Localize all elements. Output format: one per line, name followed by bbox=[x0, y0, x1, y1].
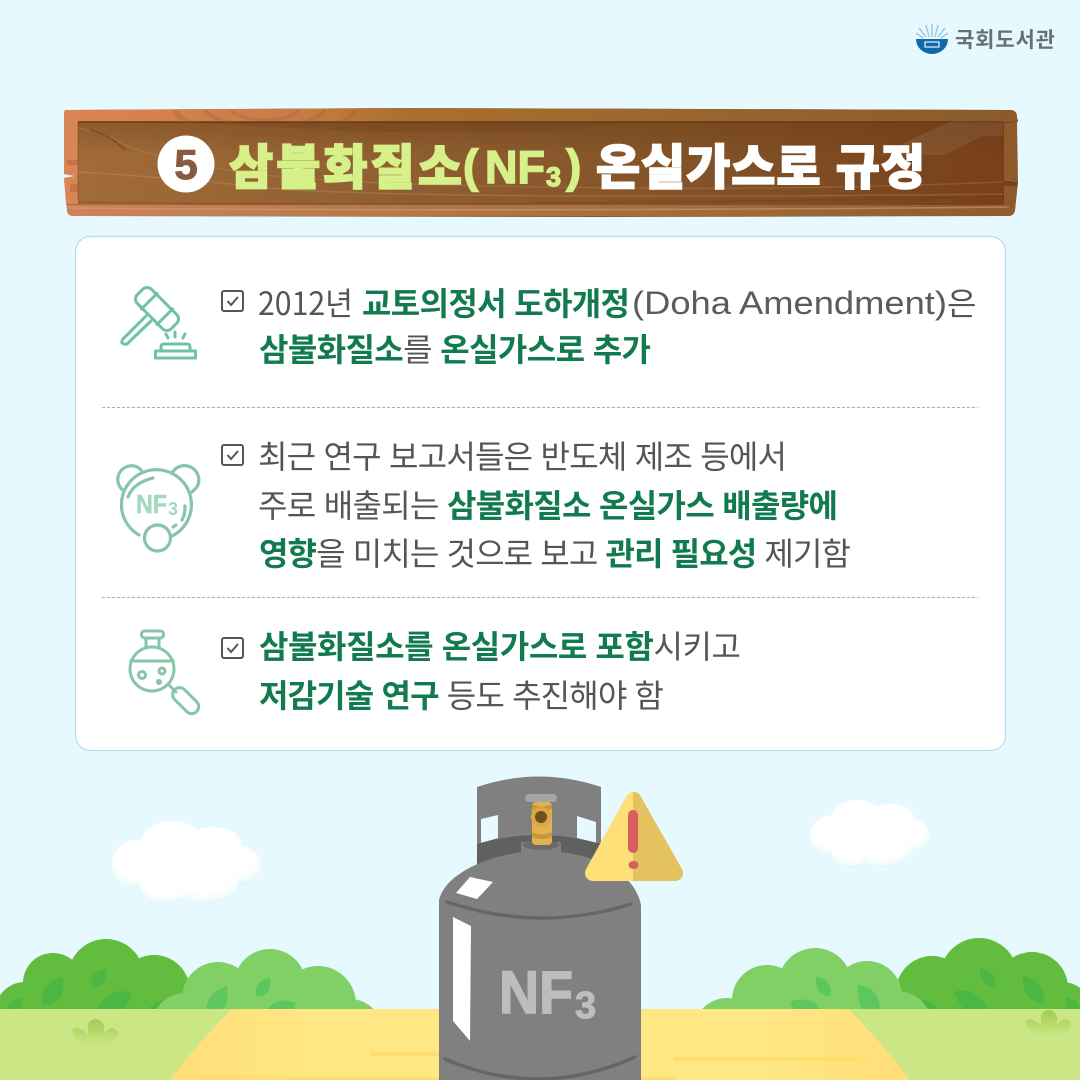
text lines: 은 bbox=[947, 279, 976, 325]
title text: 삼불화질소 bbox=[229, 128, 462, 198]
bullet 3 bbox=[222, 622, 741, 717]
grass tuft left bbox=[72, 1019, 118, 1045]
checkbox bbox=[222, 445, 243, 465]
logo: National Assembly Library bbox=[916, 24, 1055, 54]
collar shadow band bbox=[477, 835, 601, 870]
text lines: 주로 배출되는 삼불화질소 온실가스 배출량에 bbox=[258, 481, 838, 527]
title text bbox=[229, 128, 925, 198]
cylinder label: 3 bbox=[575, 985, 596, 1027]
icon: flask and magnifier bbox=[130, 631, 202, 717]
warning triangle bbox=[593, 800, 675, 873]
cylinder body bbox=[439, 851, 641, 1080]
wood rings bbox=[173, 110, 357, 121]
logo wordmark: 국회도서관 bbox=[955, 24, 1055, 54]
checkbox bbox=[222, 638, 243, 658]
cloud right bbox=[810, 800, 929, 867]
cylinder neck bbox=[521, 842, 561, 856]
title text: ) bbox=[566, 140, 581, 192]
body bands bbox=[445, 902, 635, 1079]
road streaks bbox=[201, 1052, 867, 1080]
checkbox bbox=[222, 291, 243, 311]
top inner shadow bbox=[78, 122, 1003, 156]
bullet 1 bbox=[222, 279, 976, 371]
text lines: 삼불화질소를 온실가스로 포함시키고 bbox=[259, 622, 741, 668]
number badge: 5 bbox=[174, 141, 198, 188]
collar windows bbox=[481, 815, 596, 843]
text lines: 2012년 bbox=[258, 279, 353, 325]
road bbox=[160, 1009, 920, 1080]
cylinder label: NF bbox=[499, 959, 573, 1026]
text lines: (Doha Amendment) bbox=[632, 285, 947, 321]
text lines bbox=[258, 432, 851, 575]
dark bush bbox=[0, 939, 188, 1009]
icon: gavel bbox=[122, 284, 196, 358]
number badge bbox=[158, 136, 214, 192]
icon: NF3 molecule bubble bbox=[118, 466, 199, 551]
text lines: 최근 연구 보고서들은 반도체 제조 등에서 bbox=[258, 432, 787, 478]
grass tuft right bbox=[1025, 1010, 1071, 1036]
highlights bbox=[453, 877, 493, 1041]
icon: NF3 molecule bubble: NF bbox=[136, 489, 167, 519]
light bush bbox=[702, 948, 928, 1009]
text lines: 교토의정서 도하개정 bbox=[362, 279, 630, 325]
text lines: 저감기술 연구 등도 추진해야 함 bbox=[259, 671, 664, 717]
text lines: 삼불화질소를 온실가스로 추가 bbox=[259, 325, 651, 371]
title text: ( bbox=[463, 140, 479, 192]
dark bush bbox=[898, 938, 1080, 1009]
valve bbox=[525, 794, 557, 845]
light bush bbox=[156, 949, 374, 1009]
gas cylinder NF3 bbox=[439, 776, 641, 1080]
text lines bbox=[259, 622, 741, 717]
title text: 온실가스로 규정 bbox=[596, 128, 925, 198]
ground bbox=[0, 1009, 1080, 1080]
text lines: 영향을 미치는 것으로 보고 관리 필요성 제기함 bbox=[259, 529, 851, 575]
collar bbox=[477, 776, 601, 870]
title text: NF bbox=[485, 141, 545, 193]
title text: 3 bbox=[546, 162, 561, 192]
cloud left bbox=[112, 821, 261, 903]
icon: NF3 molecule bubble: 3 bbox=[168, 499, 178, 519]
grass right bbox=[848, 1009, 1080, 1080]
grass left bbox=[0, 1009, 232, 1080]
content card bbox=[76, 236, 1006, 750]
wooden title plank bbox=[64, 108, 1018, 217]
text lines bbox=[258, 279, 976, 371]
logo icon bbox=[916, 24, 948, 54]
bushes right bbox=[702, 938, 1080, 1009]
neck ellipse bbox=[523, 840, 559, 850]
bullet 2 bbox=[222, 432, 851, 575]
bushes left bbox=[0, 939, 374, 1009]
